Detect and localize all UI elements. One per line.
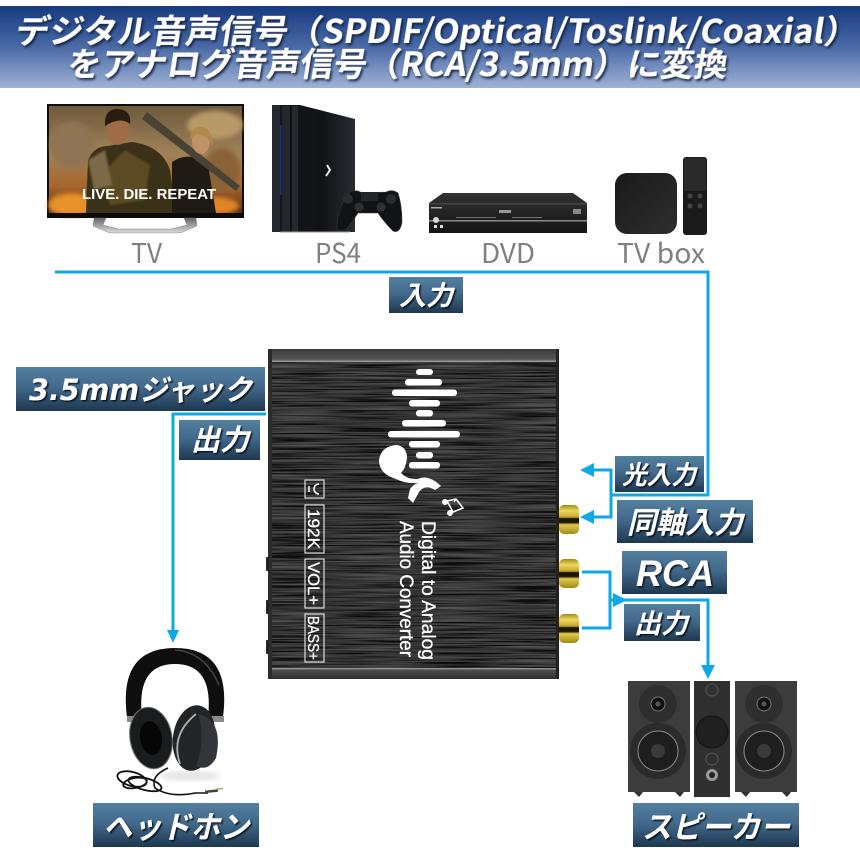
icon: headphones xyxy=(116,648,224,795)
arrow: input line xyxy=(55,272,708,524)
icon: music note xyxy=(443,499,463,515)
badge: VOL+: VOL+ xyxy=(304,562,323,605)
label: headphones: ヘッドホン xyxy=(103,802,251,847)
header banner xyxy=(0,4,860,88)
device: audio converter xyxy=(266,349,559,679)
label: RCA: RCA xyxy=(636,553,714,594)
title line 1: デジタル音声信号（SPDIF/Optical/Toslink/Coaxial） xyxy=(12,4,860,53)
label: 3.5mm jack: 3.5mmジャック xyxy=(29,373,254,407)
label: DVD: DVD xyxy=(481,232,535,271)
badge: headphone xyxy=(305,480,324,498)
label: TV box: TV box xyxy=(617,232,706,271)
amplifier xyxy=(694,681,730,797)
tv screen caption: LIVE. DIE. REPEAT xyxy=(82,186,216,203)
logo: waveform xyxy=(379,369,460,503)
label: optical input: 光入力 xyxy=(622,455,699,492)
icon: TV box and remote xyxy=(615,157,707,235)
label: TV: TV xyxy=(131,232,162,271)
icon: PS4 console and controller xyxy=(272,105,402,233)
icon: speakers xyxy=(628,681,797,797)
badge: 192K: 192K xyxy=(304,509,323,550)
label: output left: 出力 xyxy=(191,417,252,459)
product name: Digital to Analog xyxy=(417,521,438,660)
label: speakers: スピーカー xyxy=(642,802,791,847)
label: input: 入力 xyxy=(399,274,456,313)
connector: coaxial jack xyxy=(559,505,579,534)
title line 2: をアナログ音声信号（RCA/3.5mm）に変換 xyxy=(64,37,732,86)
arrow: RCA output to speakers xyxy=(582,572,715,679)
badge: BASS+: BASS+ xyxy=(304,616,321,660)
label: coaxial input: 同軸入力 xyxy=(627,498,746,542)
connector: RCA jack lower xyxy=(559,614,579,643)
right speaker xyxy=(735,681,797,797)
arrow: headphone output xyxy=(167,414,266,643)
label: PS4: PS4 xyxy=(315,232,361,271)
left speaker xyxy=(628,681,690,797)
product name line 2: Audio Converter xyxy=(395,521,416,658)
label: output left xyxy=(179,417,260,460)
label: output right: 出力 xyxy=(634,602,691,641)
connector: RCA jack upper xyxy=(559,559,579,588)
icon: TV xyxy=(47,104,244,233)
icon: DVD player xyxy=(429,193,587,233)
